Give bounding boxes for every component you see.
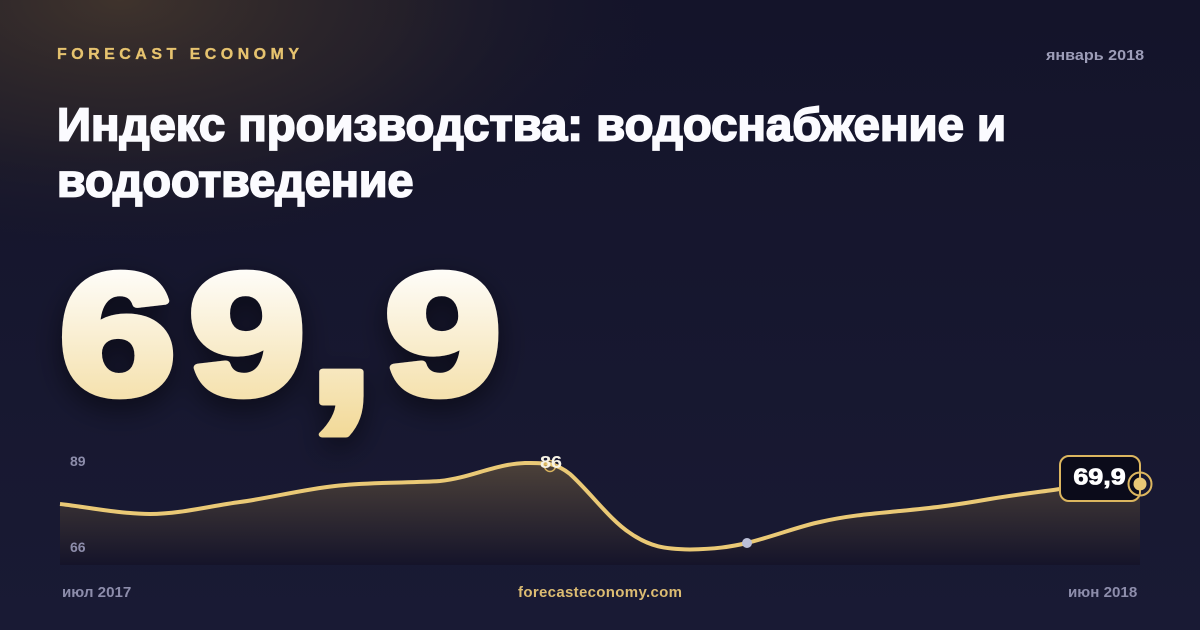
peak marker	[544, 460, 556, 472]
big value: ,	[305, 215, 377, 446]
line chart	[60, 453, 1152, 565]
big value: 9	[189, 238, 305, 430]
title: водоотведение	[57, 155, 413, 206]
current value callout: 69,9	[1073, 464, 1126, 490]
big value: 6	[59, 238, 176, 430]
area under line	[60, 463, 1140, 565]
axis label: min: 66	[70, 539, 86, 555]
low point marker	[742, 538, 752, 548]
data line	[60, 463, 1140, 550]
big value	[59, 215, 501, 446]
current value marker	[1128, 472, 1152, 496]
title	[57, 99, 1006, 206]
source url: forecasteconomy.com	[518, 584, 682, 601]
title: Индекс производства: водоснабжение и	[57, 99, 1006, 150]
axis label: max: 89	[70, 453, 86, 469]
current value callout	[1060, 456, 1140, 501]
big value: 9	[385, 238, 501, 430]
peak label: 86	[540, 453, 562, 473]
start date: июл 2017	[62, 585, 131, 601]
brand label: FORECAST ECONOMY	[57, 46, 299, 63]
end date: июн 2018	[1068, 585, 1137, 601]
date label: январь 2018	[1046, 47, 1144, 64]
